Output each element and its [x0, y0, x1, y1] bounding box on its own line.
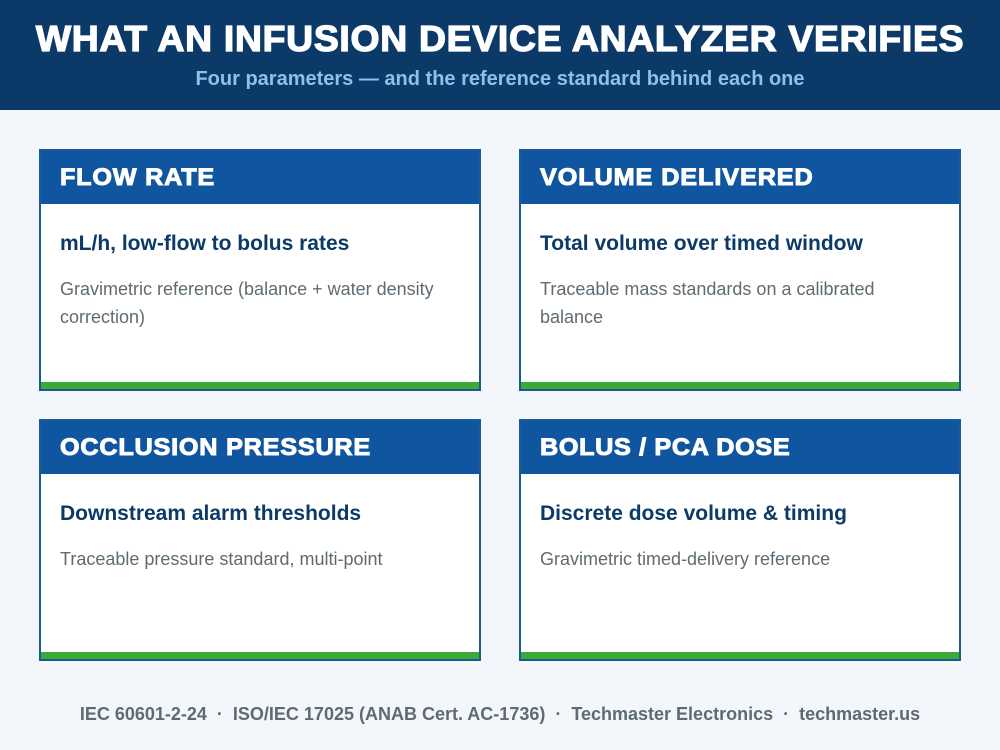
- panel heading: volume delivered: [519, 149, 961, 204]
- panel heading: bolus / PCA dose: BOLUS / PCA DOSE: [540, 434, 790, 461]
- panel: volume delivered: [519, 149, 961, 391]
- parameter range: Downstream alarm thresholds: [60, 502, 361, 525]
- panel heading: flow rate: [39, 149, 481, 204]
- panel heading: volume delivered: VOLUME DELIVERED: [540, 164, 814, 191]
- reference standard text: Traceable pressure standard, multi-point: [60, 549, 382, 569]
- header band: [0, 0, 1000, 110]
- green accent bar: [41, 382, 479, 389]
- footer standards line: IEC 60601-2-24 · ISO/IEC 17025 (ANAB Cert. AC-1736) · Techmaster Electronics · techmaster.us: [80, 704, 920, 724]
- reference standard text: Gravimetric reference (balance + water density correction): [60, 279, 434, 327]
- panel: occlusion pressure: [39, 419, 481, 661]
- panel: flow rate: [39, 149, 481, 391]
- panel heading: bolus / PCA dose: [519, 419, 961, 474]
- green accent bar: [521, 382, 959, 389]
- panel heading: flow rate: FLOW RATE: [60, 164, 215, 191]
- reference standard text: Gravimetric timed-delivery reference: [540, 549, 830, 569]
- panel heading: occlusion pressure: [39, 419, 481, 474]
- subtitle: Four parameters — and the reference standard behind each one: [195, 68, 805, 90]
- parameter range: mL/h, low-flow to bolus rates: [60, 232, 349, 255]
- panel: bolus / PCA dose: [519, 419, 961, 661]
- parameter range: Total volume over timed window: [540, 232, 863, 255]
- title: WHAT AN INFUSION DEVICE ANALYZER VERIFIES: [36, 18, 964, 59]
- green accent bar: [41, 652, 479, 659]
- reference standard text: Traceable mass standards on a calibrated balance: [540, 279, 875, 327]
- panel heading: occlusion pressure: OCCLUSION PRESSURE: [60, 434, 371, 461]
- green accent bar: [521, 652, 959, 659]
- parameter range: Discrete dose volume & timing: [540, 502, 847, 525]
